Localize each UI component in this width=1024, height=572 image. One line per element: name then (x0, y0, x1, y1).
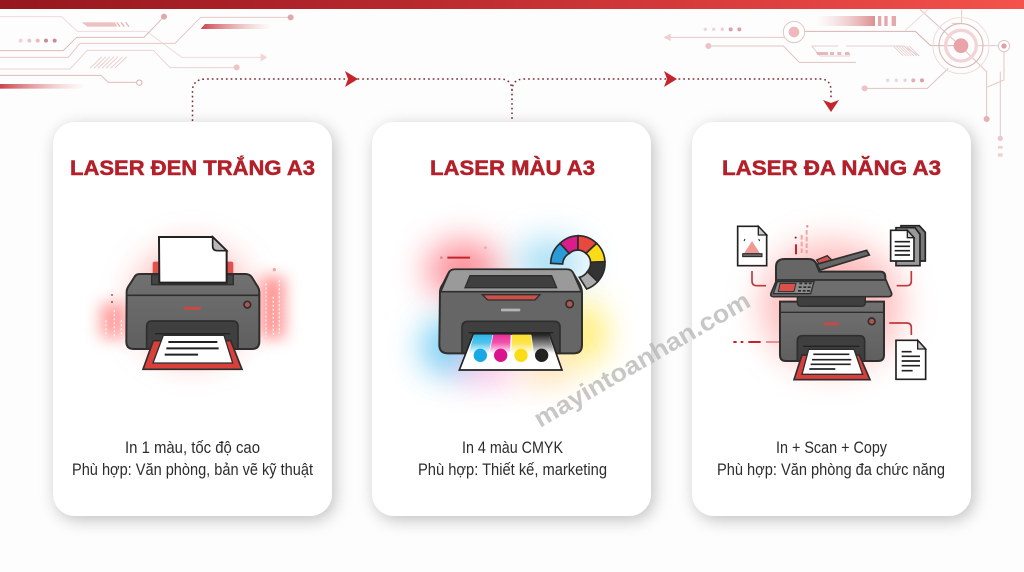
description: In 4 màu CMYK (462, 438, 564, 457)
description (717, 438, 945, 479)
description: Phù hợp: Thiết kế, marketing (418, 460, 607, 479)
heading: LASER MÀU A3 (430, 157, 595, 180)
colour wheel (551, 236, 605, 289)
panel: laser mau A3 (372, 122, 651, 516)
description: In + Scan + Copy (776, 438, 887, 457)
connector lines (752, 271, 911, 335)
description (418, 438, 607, 479)
document: output (896, 340, 926, 379)
description: In 1 màu, tốc độ cao (125, 438, 260, 457)
icon: colour printer (423, 236, 605, 380)
document: scan (738, 226, 767, 266)
heading: LASER ĐA NĂNG A3 (722, 157, 941, 180)
heading: LASER ĐEN TRẮNG A3 (70, 156, 315, 180)
document: copies (891, 226, 925, 266)
icon: multifunction printer (733, 225, 926, 380)
icon: monochrome printer (82, 237, 303, 369)
card background (692, 122, 971, 516)
description: Phù hợp: Văn phòng đa chức năng (717, 460, 945, 479)
dotted connector arrows (192, 71, 839, 121)
panel: laser da nang A3 (692, 122, 971, 516)
card background (53, 122, 332, 516)
circuit decoration: top right (663, 9, 1010, 157)
panel: laser den trang A3 (53, 122, 332, 516)
top bar (0, 0, 1024, 9)
description: Phù hợp: Văn phòng, bản vẽ kỹ thuật (72, 460, 313, 479)
description (72, 438, 313, 479)
circuit decoration: top left (0, 14, 294, 89)
card background (372, 122, 651, 516)
watermark: mayintoanhan.com (529, 286, 755, 433)
